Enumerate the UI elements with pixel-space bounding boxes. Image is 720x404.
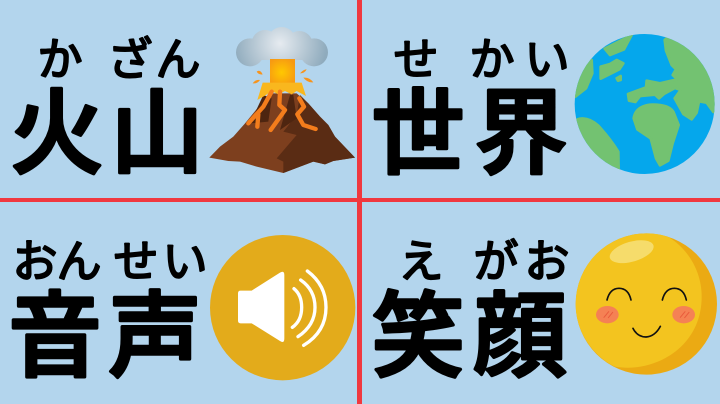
furigana: sekai bbox=[393, 34, 570, 85]
furigana: onsei: ん bbox=[56, 236, 102, 287]
heading: egao bbox=[372, 285, 566, 389]
furigana: kazan: か bbox=[37, 34, 83, 85]
divider: vertical red line bbox=[357, 0, 362, 404]
heading: sekai bbox=[372, 82, 568, 186]
heading: egao: 顔 bbox=[474, 285, 566, 389]
furigana: onsei: い bbox=[162, 236, 208, 287]
furigana: egao bbox=[398, 236, 570, 287]
furigana: kazan: ん bbox=[155, 34, 201, 85]
icon: smiling face bbox=[576, 233, 717, 375]
heading: sekai: 界 bbox=[474, 82, 568, 186]
panel: world bbox=[372, 34, 720, 186]
furigana: egao: お bbox=[524, 236, 570, 287]
furigana: onsei bbox=[12, 236, 208, 287]
furigana: egao: が bbox=[473, 236, 519, 287]
heading: onsei bbox=[8, 285, 202, 389]
furigana: sekai: い bbox=[524, 34, 570, 85]
heading: egao: 笑 bbox=[372, 285, 464, 389]
heading: onsei: 音 bbox=[8, 285, 102, 389]
panel: sound bbox=[8, 235, 355, 389]
heading: kazan: 火 bbox=[10, 82, 104, 186]
furigana: onsei: せ bbox=[113, 236, 159, 287]
panel: volcano bbox=[10, 27, 355, 186]
furigana: sekai: か bbox=[469, 34, 515, 85]
furigana: sekai: せ bbox=[393, 34, 439, 85]
panel: smile bbox=[372, 233, 717, 389]
furigana: kazan bbox=[37, 34, 201, 85]
icon: volcano bbox=[209, 27, 355, 173]
furigana: egao: え bbox=[398, 236, 444, 287]
furigana: onsei: お bbox=[12, 236, 58, 287]
icon: speaker bbox=[210, 235, 356, 380]
heading: sekai: 世 bbox=[372, 82, 464, 186]
furigana: kazan: ざ bbox=[107, 34, 153, 85]
icon: earth globe bbox=[574, 34, 715, 174]
heading: onsei: 声 bbox=[108, 285, 202, 389]
heading: kazan: 山 bbox=[110, 82, 204, 186]
divider: horizontal red line bbox=[0, 198, 720, 202]
heading: kazan bbox=[10, 82, 204, 186]
